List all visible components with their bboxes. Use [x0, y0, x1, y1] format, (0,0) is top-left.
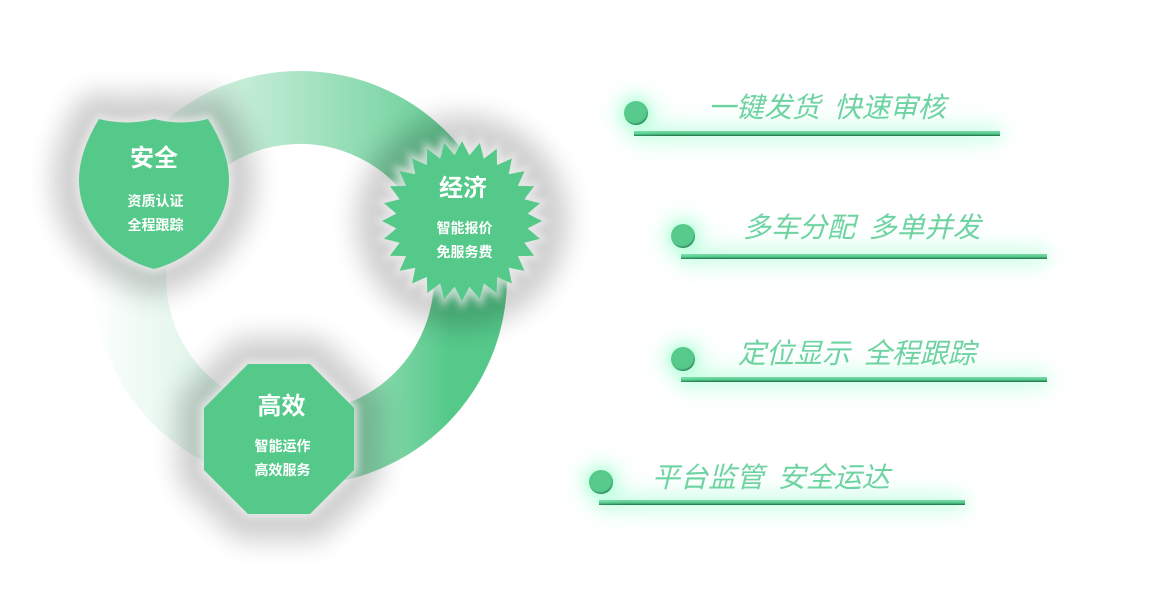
- badge: 经济: [382, 141, 542, 301]
- heading: 高效: 高效: [258, 393, 306, 420]
- shield shape: [79, 119, 229, 269]
- ring: lower right arc: [300, 278, 507, 485]
- badge: 安全: [79, 119, 229, 269]
- underline: [681, 254, 1047, 259]
- bullet: [589, 470, 613, 494]
- label: 定位显示 全程跟踪: [738, 338, 980, 369]
- item: 定位显示 全程跟踪: [671, 338, 1047, 382]
- badge: 高效: [204, 364, 354, 514]
- label: 平台监管 安全运达: [652, 462, 893, 493]
- bullet: [671, 224, 695, 248]
- underline: [681, 377, 1047, 382]
- ring: top arc: [154, 71, 507, 278]
- text: 智能报价 免服务费: 智能报价: [436, 220, 492, 236]
- item: 多车分配 多单并发: [671, 212, 1047, 259]
- text: 资质认证 全程跟踪: [128, 193, 184, 233]
- text: 智能运作 高效服务: 高效服务: [254, 462, 310, 478]
- text: 智能运作 高效服务: 智能运作: [254, 438, 310, 454]
- octagon shape: [204, 364, 354, 514]
- starburst shape: [382, 141, 542, 301]
- bullet: [624, 101, 648, 125]
- label: 多车分配 多单并发: [743, 212, 984, 243]
- underline: [634, 131, 1000, 136]
- text: 智能运作 高效服务: [254, 438, 310, 478]
- bullet: [671, 347, 695, 371]
- text: 资质认证 全程跟踪: 资质认证: [128, 193, 184, 209]
- ring: lower left arc: [93, 190, 300, 485]
- heading: 经济: 经济: [439, 175, 487, 202]
- text: 智能报价 免服务费: 免服务费: [436, 244, 492, 260]
- item: 平台监管 安全运达: [589, 462, 965, 505]
- item: 一键发货 快速审核: [624, 92, 1000, 136]
- text: 智能报价 免服务费: [436, 220, 492, 260]
- heading: 安全: 安全: [130, 145, 178, 172]
- underline: [599, 500, 965, 505]
- text: 资质认证 全程跟踪: 全程跟踪: [128, 217, 184, 233]
- label: 一键发货 快速审核: [708, 92, 950, 123]
